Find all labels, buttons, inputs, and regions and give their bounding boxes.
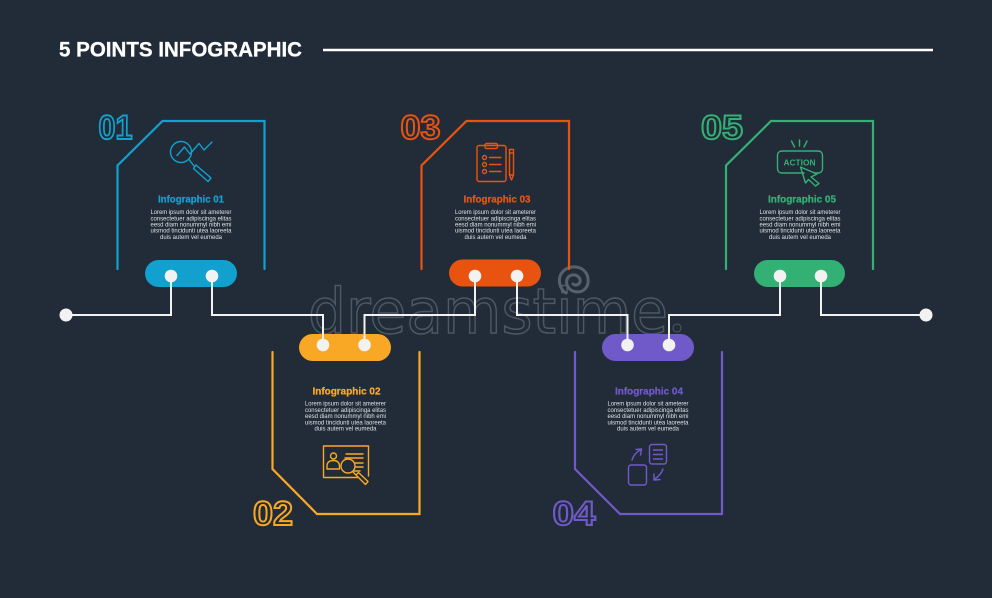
- panel 05: [701, 109, 873, 269]
- frame 02: [272, 352, 420, 514]
- number 04: 04: [552, 495, 596, 533]
- body text 05: consectetuer adipiscinga elitas: [760, 216, 840, 222]
- panel 02: [253, 352, 420, 533]
- frame 05: [726, 121, 873, 269]
- body text 01: uismod tincidunti utea laoreeta: [150, 229, 232, 235]
- icon: swap document and square: [628, 444, 666, 485]
- heading 01: Infographic 01: [158, 194, 224, 206]
- icon: magnifier with trend line: [170, 142, 212, 182]
- heading 04: Infographic 04: [615, 386, 683, 398]
- icon: profile card with magnifier: [324, 446, 368, 484]
- body text 04: [608, 402, 689, 433]
- body text 01: eesd diam nonummyl nibh emi: [150, 222, 232, 228]
- body text 05: eesd diam nonummyl nibh emi: [760, 222, 840, 228]
- heading 03: Infographic 03: [464, 194, 531, 206]
- body text 04: eesd diam nonummyl nibh emi: [608, 414, 688, 420]
- number 05: 05: [701, 109, 743, 147]
- body text 02: [305, 402, 387, 433]
- frame 01: [118, 121, 264, 269]
- body text 04: Lorem ipsum dolor sit ameterer: [608, 402, 689, 408]
- body text 04: uismod tincidunti utea laoreeta: [608, 420, 689, 426]
- body text 01: consectetuer adipiscinga elitas: [150, 216, 232, 222]
- heading 02: Infographic 02: [312, 386, 381, 398]
- body text 03: uismod tincidunti utea laoreeta: [455, 229, 537, 235]
- panel 04: [552, 352, 722, 533]
- body text 02: duis autem vel eumeda: [314, 427, 377, 433]
- body text 02: uismod tincidunti utea laoreeta: [305, 420, 387, 426]
- title: 5 POINTS INFOGRAPHIC: [59, 38, 302, 62]
- body text 01: duis autem vel eumeda: [160, 235, 223, 241]
- watermark: dreamstime: [308, 275, 668, 348]
- timeline dots: [60, 270, 932, 351]
- body text 03: eesd diam nonummyl nibh emi: [455, 222, 536, 228]
- frame 04: [575, 352, 722, 514]
- body text 02: Lorem ipsum dolor sit ameterer: [305, 402, 386, 408]
- body text 03: duis autem vel eumeda: [464, 235, 527, 241]
- body text 05: [760, 210, 841, 241]
- icon: action button with cursor: ACTION: [784, 158, 816, 168]
- body text 03: Lorem ipsum dolor sit ameterer: [455, 210, 536, 216]
- icon: action button with cursor: [778, 140, 822, 186]
- number 02: 02: [253, 495, 293, 533]
- heading 05: Infographic 05: [768, 194, 836, 206]
- panel 01: [98, 109, 264, 269]
- number 03: 03: [400, 109, 440, 147]
- body text 02: consectetuer adipiscinga elitas: [305, 408, 386, 414]
- body text 03: [455, 210, 537, 241]
- body text 04: duis autem vel eumeda: [617, 427, 680, 433]
- body text 02: eesd diam nonummyl nibh emi: [305, 414, 386, 420]
- body text 05: uismod tincidunti utea laoreeta: [760, 229, 841, 235]
- title rule: [323, 49, 933, 51]
- number 01: 01: [98, 109, 132, 147]
- panel 03: [400, 109, 569, 269]
- body text 04: consectetuer adipiscinga elitas: [608, 408, 688, 414]
- body text 03: consectetuer adipiscinga elitas: [455, 216, 536, 222]
- body text 05: duis autem vel eumeda: [769, 235, 832, 241]
- pills: [145, 260, 845, 361]
- body text 05: Lorem ipsum dolor sit ameterer: [760, 210, 841, 216]
- frame 03: [422, 121, 569, 269]
- icon: clipboard and pencil: [477, 144, 514, 182]
- body text 01: Lorem ipsum dolor sit ameterer: [150, 210, 232, 216]
- body text 01: [150, 210, 232, 241]
- timeline connector: [66, 276, 926, 345]
